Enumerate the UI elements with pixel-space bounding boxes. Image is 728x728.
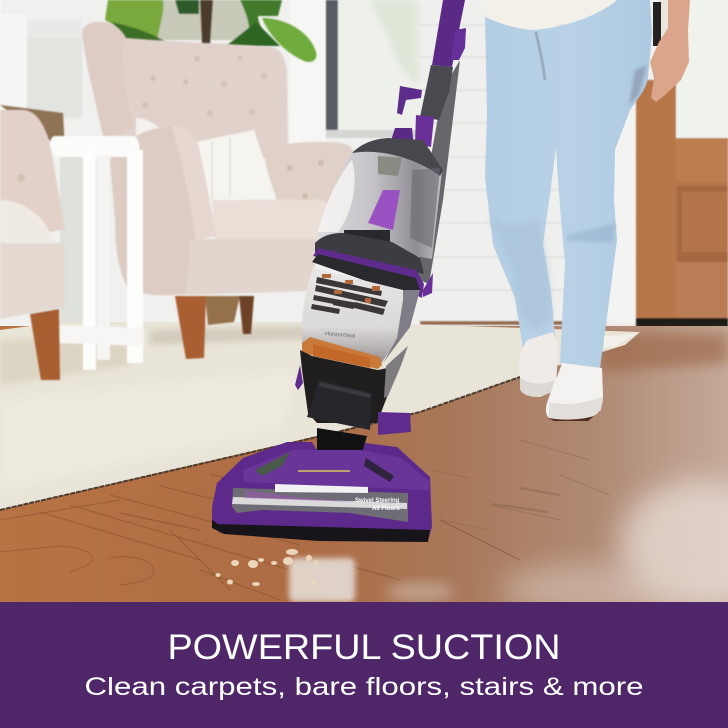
right shoe xyxy=(546,363,603,419)
black underside xyxy=(212,520,430,542)
left shoe xyxy=(519,332,558,397)
plant xyxy=(105,0,316,62)
window xyxy=(326,0,418,138)
door xyxy=(636,0,728,332)
brush window xyxy=(232,488,408,522)
debris crumbs on floor xyxy=(216,549,318,586)
black top of motor housing xyxy=(312,254,420,294)
arm and hand xyxy=(650,0,690,102)
strap xyxy=(653,2,661,46)
roller label: Swivel Steering xyxy=(355,498,400,504)
purple band xyxy=(313,248,424,298)
person: shirt, legs, hand and shoes xyxy=(483,0,690,421)
clear dust bin xyxy=(317,138,443,259)
handle wand xyxy=(388,0,466,284)
left armchair xyxy=(0,105,65,380)
floor light sheen xyxy=(289,333,728,616)
purple floorhead xyxy=(212,442,432,542)
floor wood grain xyxy=(0,474,520,600)
white shirt xyxy=(483,0,617,30)
purple clips xyxy=(378,412,411,435)
floor xyxy=(0,326,728,602)
white shag rug xyxy=(0,322,640,510)
black body and neck xyxy=(295,346,411,450)
subheading: Clean carpets, bare floors, stairs & more xyxy=(84,673,644,701)
jeans xyxy=(485,0,652,368)
heading: POWERFUL SUCTION xyxy=(168,628,560,667)
brand label: HorizonSeal xyxy=(325,331,355,340)
white side table xyxy=(50,136,144,370)
room background wall xyxy=(0,0,728,340)
chrome motor housing xyxy=(302,268,420,369)
right armchair xyxy=(82,22,353,359)
shoe shadow xyxy=(548,416,594,421)
vacuum cleaner xyxy=(212,0,466,542)
purple floorhead: All Floors xyxy=(372,506,400,512)
dark collar xyxy=(315,233,424,274)
rear grey column xyxy=(417,60,460,284)
caption banner xyxy=(0,602,728,728)
rug fringe near foot xyxy=(604,334,636,348)
